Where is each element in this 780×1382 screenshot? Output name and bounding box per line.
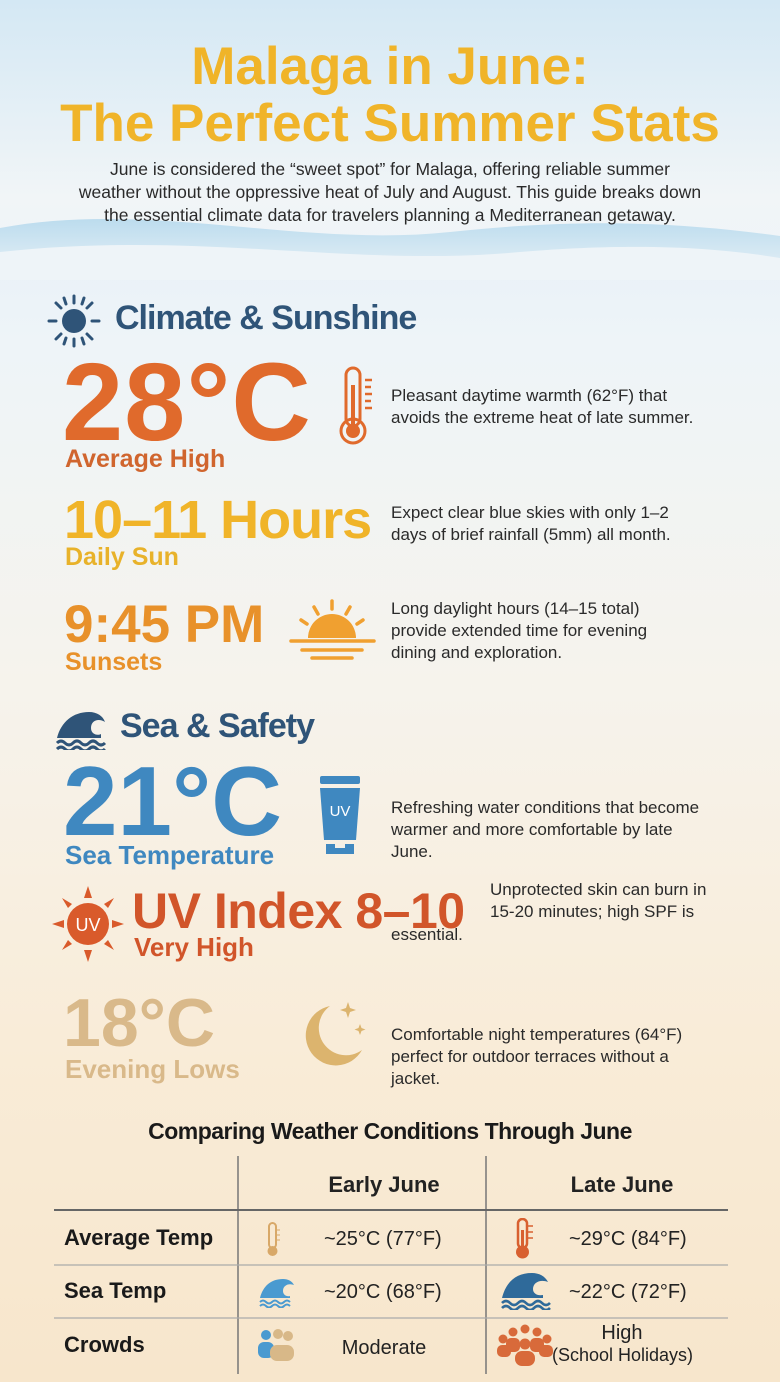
icon: moon xyxy=(306,1002,366,1066)
text: sunset description: provide extended time for evening xyxy=(391,621,647,640)
stat: 18C: 18°C xyxy=(63,985,215,1061)
text: evening description: jacket. xyxy=(391,1069,440,1088)
comparison table: Sea Temp xyxy=(64,1278,166,1303)
heading: comparison table: Comparing Weather Conditions Through June xyxy=(148,1118,632,1144)
label: Sunsets: Sunsets xyxy=(65,648,162,676)
heading: Sea & Safety: Sea & Safety xyxy=(120,707,314,745)
comparison table: High xyxy=(601,1322,643,1344)
label: Evening Lows: Evening Lows xyxy=(65,1054,240,1084)
subtitle: weather without the oppressive heat of July and August. This guide breaks down xyxy=(79,182,701,202)
text: sun description: days of brief rainfall (5mm) all month. xyxy=(391,525,671,544)
icon: sunscreen: UV xyxy=(330,803,350,820)
text: UV description xyxy=(490,880,706,921)
text: sea description: June. xyxy=(391,842,433,861)
header background xyxy=(0,168,780,258)
text: sea description: Refreshing water conditions that become xyxy=(391,798,699,817)
title: The Perfect Summer Stats xyxy=(60,94,720,153)
comparison table: ~25°C (77°F) xyxy=(324,1228,442,1250)
text: sea description xyxy=(391,798,699,861)
icon: UV sun xyxy=(52,886,124,962)
stat: 10-11 Hours: 10–11 Hours xyxy=(64,490,371,550)
subtitle: June is considered the “sweet spot” for Malaga, offering reliable summer xyxy=(110,159,670,179)
label: Sea Temperature: Sea Temperature xyxy=(65,840,274,870)
comparison table xyxy=(54,1156,728,1374)
title xyxy=(60,37,720,153)
text: UV description: 15-20 minutes; high SPF is xyxy=(490,902,694,921)
label: Daily Sun: Daily Sun xyxy=(65,543,179,571)
text: sun description: Expect clear blue skies with only 1–2 xyxy=(391,503,669,522)
icon: big wave late xyxy=(501,1273,551,1310)
subtitle xyxy=(78,159,701,225)
icon: wave xyxy=(56,712,106,750)
icon: sunset xyxy=(289,599,376,660)
text: sun description xyxy=(391,503,671,544)
label: Average High: Average High xyxy=(65,445,225,473)
comparison table: Crowds xyxy=(64,1332,145,1357)
text: evening description xyxy=(390,1025,682,1088)
comparison table: ~20°C (68°F) xyxy=(324,1281,442,1303)
label: Very High: Very High xyxy=(134,932,254,962)
text: 28C description: avoids the extreme heat of late summer. xyxy=(391,408,693,427)
icon: small wave early xyxy=(259,1279,294,1308)
stat: 21C: 21°C xyxy=(63,746,282,856)
text: sea description: warmer and more comfortable by late xyxy=(391,820,673,839)
text: sunset description xyxy=(391,599,647,662)
icon: sunscreen xyxy=(320,776,360,854)
text: 28C description xyxy=(391,386,693,427)
text: UV description: Unprotected skin can burn in xyxy=(490,880,706,899)
header: Early June: Early June xyxy=(328,1172,440,1197)
text: sunset description: Long daylight hours (14–15 total) xyxy=(391,599,640,618)
header: Late June: Late June xyxy=(571,1172,673,1197)
icon: people crowd xyxy=(497,1324,553,1366)
comparison table: ~22°C (72°F) xyxy=(569,1281,687,1303)
icon: thermometer late xyxy=(516,1218,533,1258)
text: evening description: Comfortable night temperatures (64°F) xyxy=(391,1025,682,1044)
icon: small thermometer early xyxy=(268,1222,280,1256)
row labels: Average Temp xyxy=(64,1225,213,1250)
icon: UV sun: UV xyxy=(75,915,101,935)
stat: 28C: 28°C xyxy=(62,341,312,464)
comparison table: Moderate xyxy=(342,1337,426,1359)
stat: UV Index: UV Index 8–10 xyxy=(132,883,465,939)
icon: people moderate xyxy=(258,1329,294,1361)
icon: sun xyxy=(48,294,100,348)
text: evening description: perfect for outdoor terraces without a xyxy=(391,1047,669,1066)
icon: thermometer xyxy=(340,366,372,444)
text: 28C description: Pleasant daytime warmth (62°F) that xyxy=(391,386,667,405)
heading: Climate & Sunshine: Climate & Sunshine xyxy=(115,299,416,337)
stat: sunset time: 9:45 PM xyxy=(64,595,264,654)
text: essential. xyxy=(391,925,463,944)
text: sunset description: dining and exploration. xyxy=(391,643,562,662)
comparison table: ~29°C (84°F) xyxy=(569,1228,687,1250)
title: Malaga in June: xyxy=(191,37,589,96)
comparison table: (School Holidays) xyxy=(552,1345,693,1365)
subtitle: the essential climate data for travelers planning a Mediterranean getaway. xyxy=(104,205,676,225)
